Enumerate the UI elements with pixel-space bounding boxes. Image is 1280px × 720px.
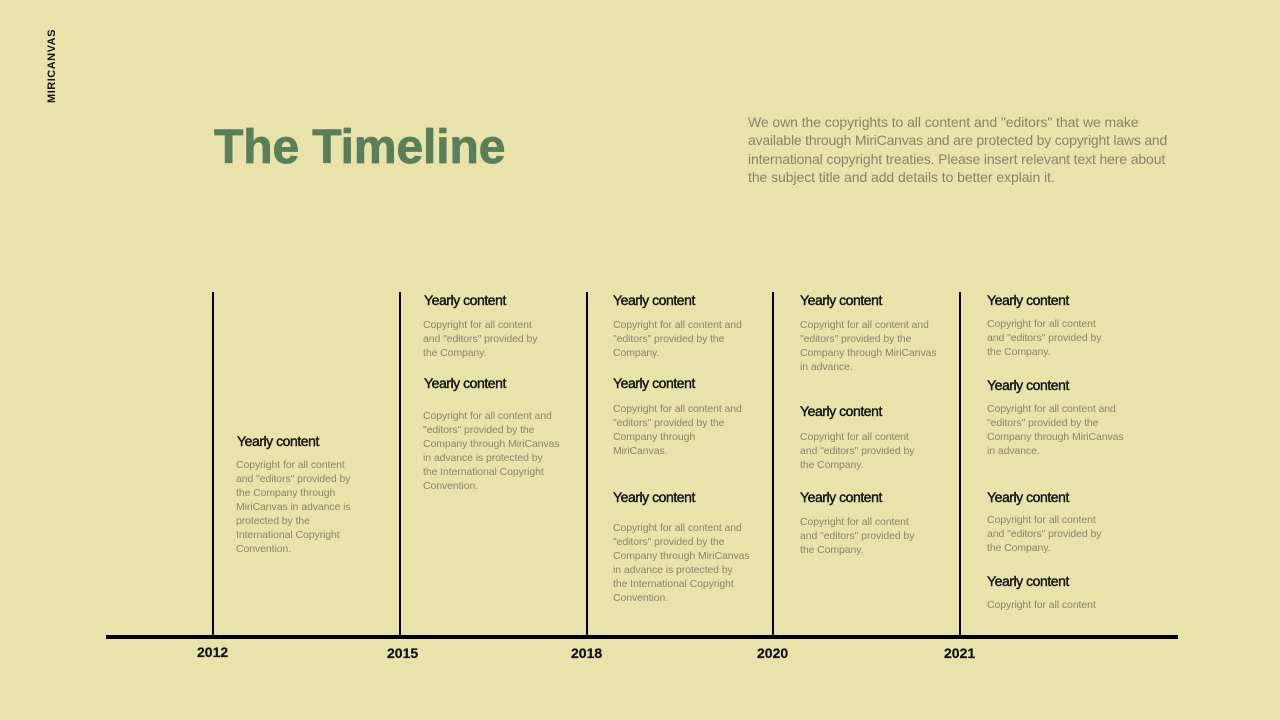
- 2018 text 3: "editors" provided by the: [613, 536, 724, 548]
- 2015 heading 2: Yearly content: [424, 375, 506, 391]
- 2015 text 2: Copyright for all content and: [423, 410, 552, 422]
- 2020 heading 3: Yearly content: [800, 489, 882, 505]
- 2020 text 1: Company through MiriCanvas: [800, 347, 937, 359]
- 2020 text 1: "editors" provided by the: [800, 333, 911, 345]
- 2018 text 1: Company.: [613, 347, 659, 359]
- 2020 text 2: [800, 431, 914, 471]
- 2020 text 3: the Company.: [800, 544, 864, 556]
- 2018 text 3: Copyright for all content and: [613, 522, 742, 534]
- year 2012: 2012: [197, 644, 228, 660]
- 2012 text: Copyright for all content: [236, 459, 345, 471]
- 2021 heading 1: Yearly content: [987, 292, 1069, 308]
- 2018 text 2: "editors" provided by the: [613, 417, 724, 429]
- 2015 text 2: Company through MiriCanvas: [423, 438, 560, 450]
- 2020 heading 1: Yearly content: [800, 292, 882, 308]
- year 2015: 2015: [387, 645, 418, 661]
- 2021 text 2: Company through MiriCanvas: [987, 431, 1124, 443]
- 2020 text 3: Copyright for all content: [800, 516, 909, 528]
- 2021 text 2: "editors" provided by the: [987, 417, 1098, 429]
- brand label: MIRICANVAS: [46, 29, 58, 103]
- 2018 text 1: [613, 319, 742, 359]
- 2012 text: protected by the: [236, 515, 310, 527]
- 2021 heading 4: Yearly content: [987, 573, 1069, 589]
- 2020 text 3: [800, 516, 914, 556]
- 2020 text 1: in advance.: [800, 361, 853, 373]
- 2015 text 2: Convention.: [423, 480, 478, 492]
- year 2018: 2018: [571, 645, 602, 661]
- 2018 heading 3: Yearly content: [613, 489, 695, 505]
- intro text: available through MiriCanvas and are protected by copyright laws and: [748, 132, 1167, 148]
- 2021 text 2: [987, 403, 1124, 457]
- 2021 text 1: the Company.: [987, 346, 1051, 358]
- 2021 heading 2: Yearly content: [987, 377, 1069, 393]
- 2020 text 2: and "editors" provided by: [800, 445, 914, 457]
- timeline axis: [106, 635, 1178, 639]
- 2018 text 3: the International Copyright: [613, 578, 734, 590]
- 2020 text 2: the Company.: [800, 459, 864, 471]
- 2021 heading 3: Yearly content: [987, 489, 1069, 505]
- 2015 text 1: the Company.: [423, 347, 487, 359]
- 2015 text 2: the International Copyright: [423, 466, 544, 478]
- 2018 text 3: Convention.: [613, 592, 668, 604]
- 2021 text 1: and "editors" provided by: [987, 332, 1101, 344]
- 2015 text 2: "editors" provided by the: [423, 424, 534, 436]
- 2018 text 1: "editors" provided by the: [613, 333, 724, 345]
- 2015 text 1: Copyright for all content: [423, 319, 532, 331]
- 2021 text 1: [987, 318, 1102, 358]
- 2020 text 1: Copyright for all content and: [800, 319, 929, 331]
- 2021 text 2: Copyright for all content and: [987, 403, 1116, 415]
- 2015 text 1: and "editors" provided by: [423, 333, 537, 345]
- intro text: [748, 114, 1167, 185]
- 2012 text: the Company through: [236, 487, 335, 499]
- 2015 heading 1: Yearly content: [424, 292, 506, 308]
- 2012 text: International Copyright: [236, 529, 340, 541]
- intro text: the subject title and add details to better explain it.: [748, 169, 1055, 185]
- 2018 heading 1: Yearly content: [613, 292, 695, 308]
- 2020 text 2: Copyright for all content: [800, 431, 909, 443]
- 2020 text 1: [800, 319, 937, 373]
- 2021 text 1: Copyright for all content: [987, 318, 1096, 330]
- year 2020: 2020: [757, 645, 788, 661]
- intro text: We own the copyrights to all content and "editors" that we make: [748, 114, 1138, 130]
- 2015 text 1: [423, 319, 538, 359]
- marker line 2020: [772, 292, 774, 636]
- marker line 2012: [212, 292, 214, 636]
- marker line 2021: [959, 292, 961, 636]
- year 2021: 2021: [944, 645, 975, 661]
- 2018 text 2: MiriCanvas.: [613, 445, 667, 457]
- 2018 text 3: [613, 522, 750, 604]
- 2018 text 2: Company through: [613, 431, 695, 443]
- 2012 text: [236, 459, 351, 555]
- 2018 text 2: Copyright for all content and: [613, 403, 742, 415]
- 2021 text 3: and "editors" provided by: [987, 528, 1101, 540]
- 2021 text 3: Copyright for all content: [987, 514, 1096, 526]
- 2015 text 2: in advance is protected by: [423, 452, 543, 464]
- 2020 text 3: and "editors" provided by: [800, 530, 914, 542]
- 2018 text 3: in advance is protected by: [613, 564, 733, 576]
- 2018 heading 2: Yearly content: [613, 375, 695, 391]
- 2021 text 2: in advance.: [987, 445, 1040, 457]
- 2018 text 1: Copyright for all content and: [613, 319, 742, 331]
- marker line 2015: [399, 292, 401, 636]
- marker line 2018: [586, 292, 588, 636]
- 2018 text 2: [613, 403, 742, 457]
- 2021 text 3: [987, 514, 1102, 554]
- 2021 text 4: Copyright for all content: [987, 599, 1096, 611]
- 2012 heading: Yearly content: [237, 433, 319, 449]
- 2018 text 3: Company through MiriCanvas: [613, 550, 750, 562]
- 2015 text 2: [423, 410, 560, 492]
- 2021 text 3: the Company.: [987, 542, 1051, 554]
- title: The Timeline: [214, 121, 505, 174]
- 2012 text: MiriCanvas in advance is: [236, 501, 351, 513]
- 2012 text: Convention.: [236, 543, 291, 555]
- 2020 heading 2: Yearly content: [800, 403, 882, 419]
- intro text: international copyright treaties. Please insert relevant text here about: [748, 151, 1165, 167]
- 2012 text: and "editors" provided by: [236, 473, 350, 485]
